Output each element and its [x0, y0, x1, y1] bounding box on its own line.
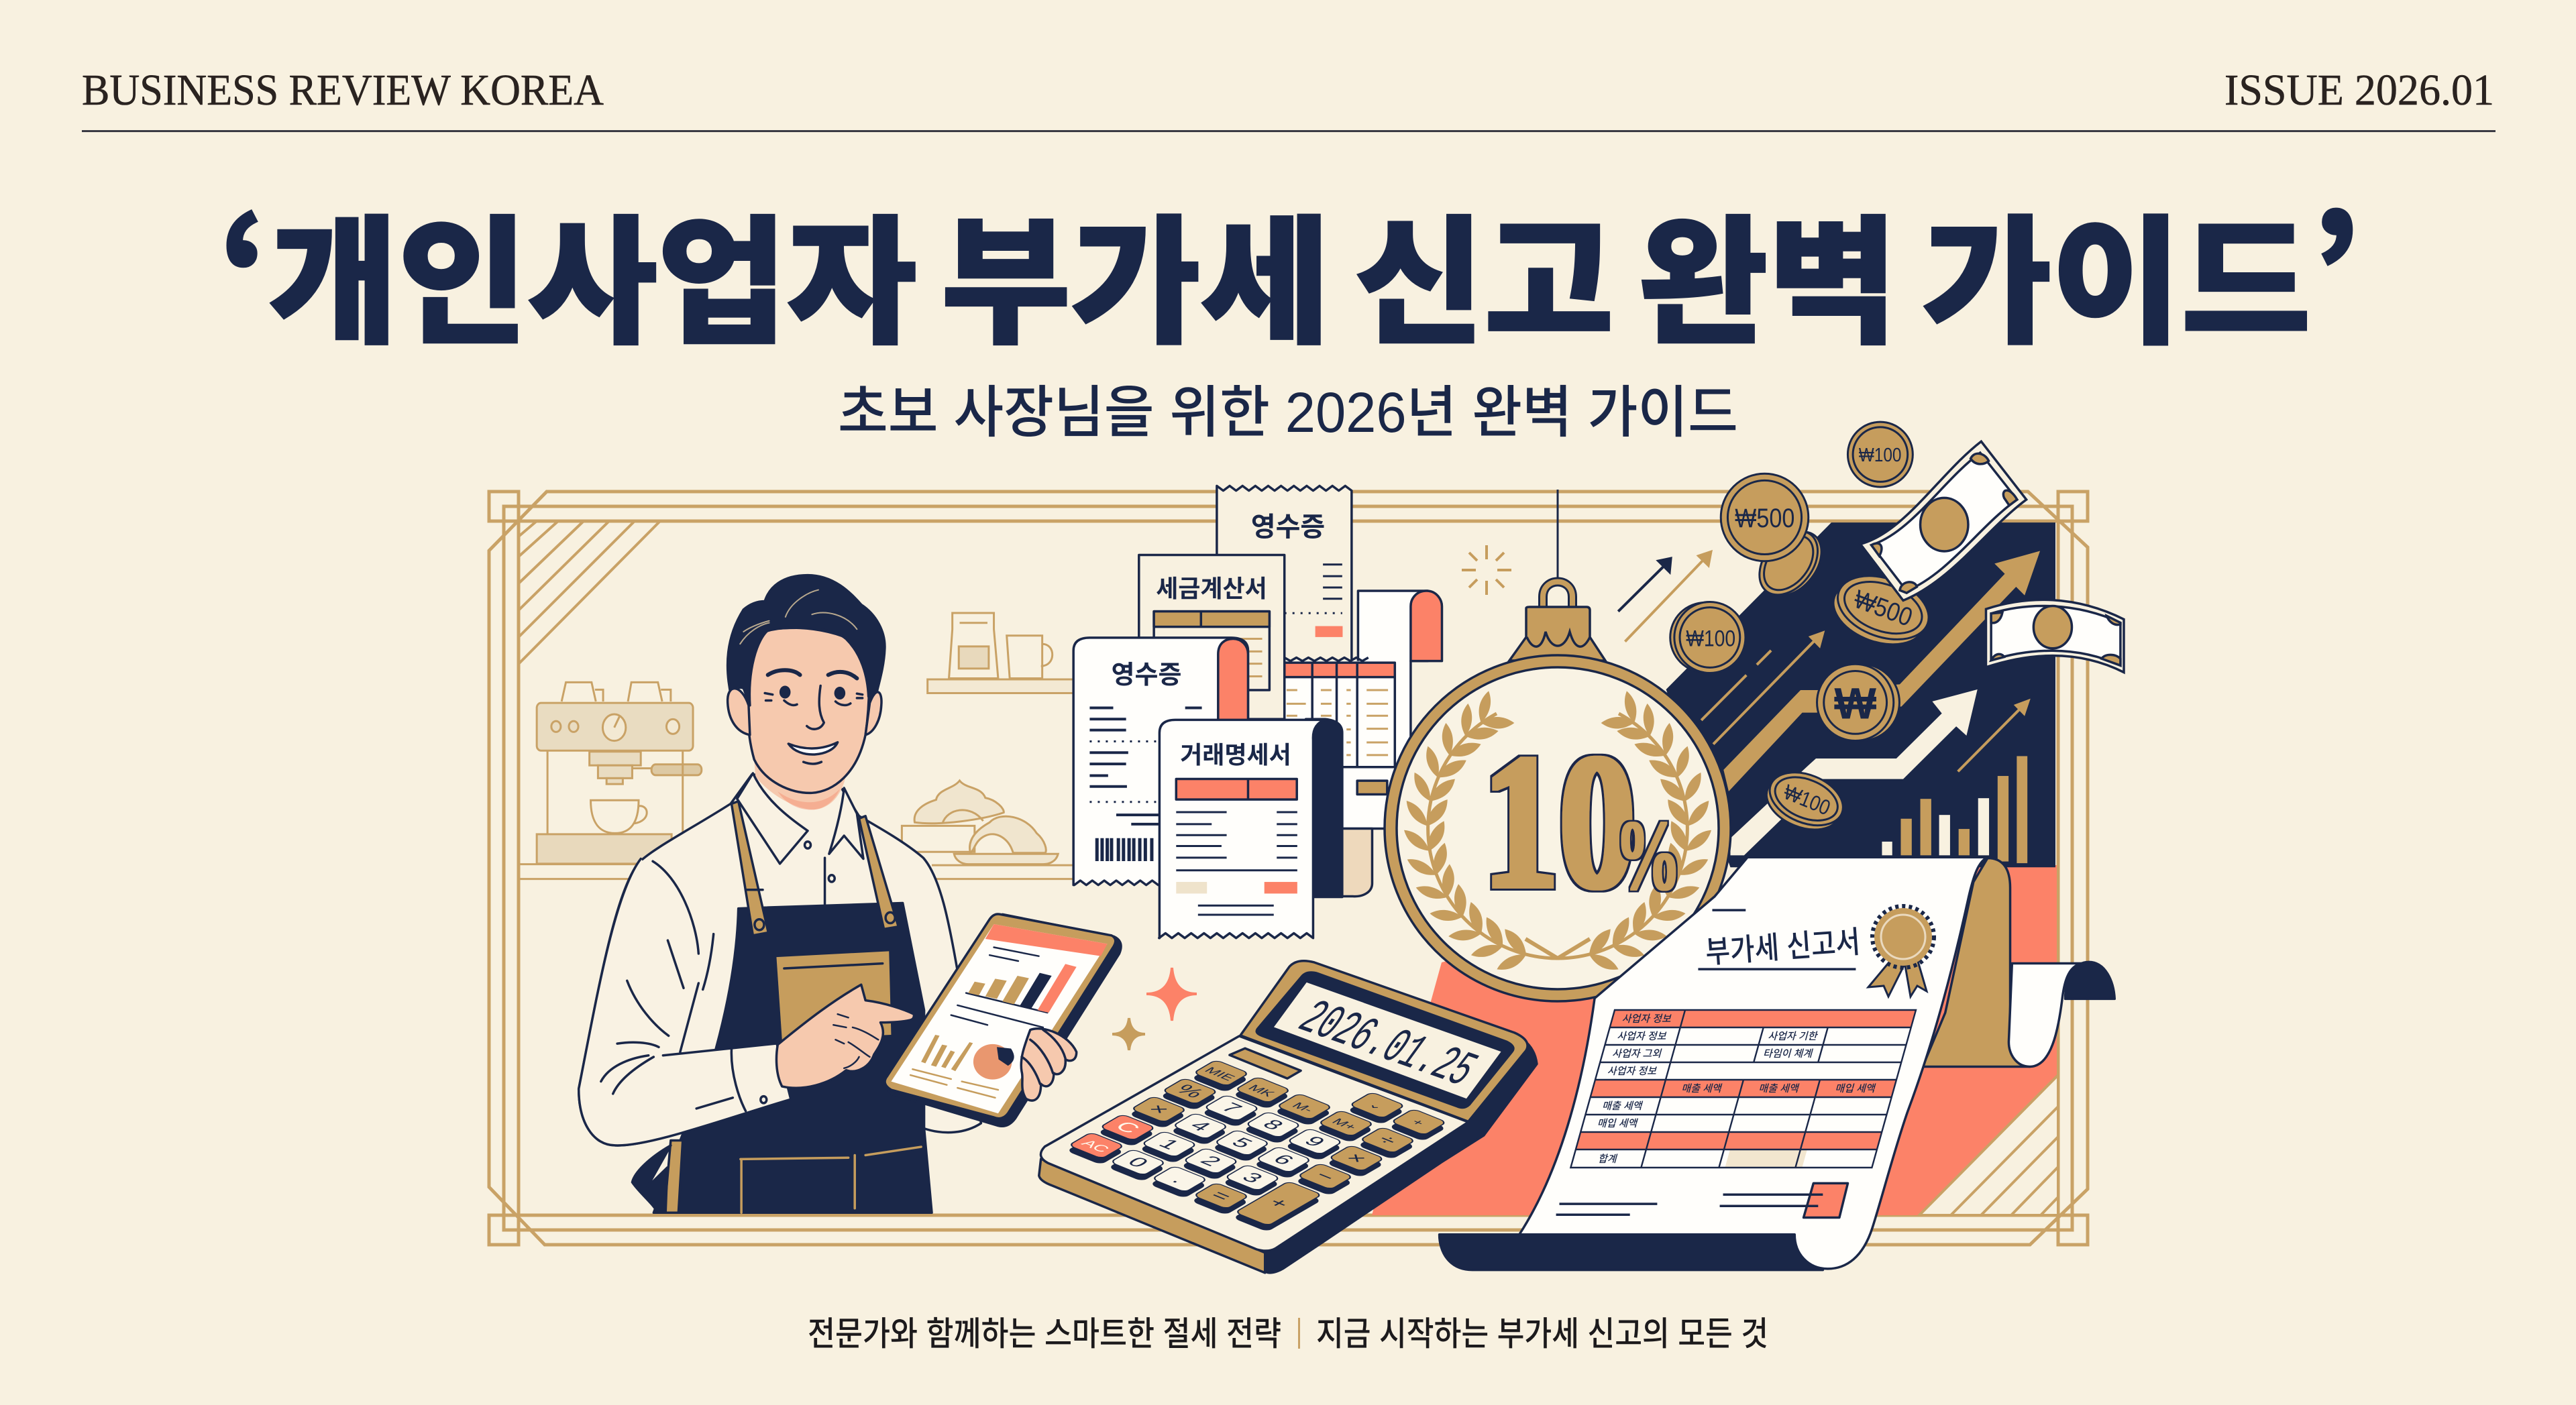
memory and function keys: MK [1244, 1083, 1278, 1099]
white arrow [1731, 689, 1978, 855]
number keys: 6 [1268, 1151, 1299, 1168]
coin: won sign: ₩ [1834, 679, 1876, 728]
calculator keypad [1063, 1042, 1452, 1231]
apron lower pocket stitching [741, 1147, 921, 1213]
table white rows [1570, 1027, 1911, 1168]
label: statement: 거래명세서 [1180, 736, 1291, 771]
solar strip [1230, 1048, 1301, 1078]
number keys: 5 [1226, 1135, 1258, 1151]
coin: 500: ₩500 [1735, 504, 1794, 533]
memory and function keys: ⌄ [1364, 1100, 1388, 1112]
calculator [1039, 961, 1537, 1273]
title: ‘개인사업자 부가세 신고 완벽 가이드’ [219, 172, 2361, 372]
table sheet [1285, 657, 1395, 767]
memory and function keys: M+ [1328, 1117, 1360, 1132]
scroll navy base [1440, 1235, 1823, 1270]
statement stamps [1176, 882, 1297, 893]
tax invoice header [1154, 612, 1269, 690]
table labels: 사업자 정보 [1616, 1031, 1668, 1042]
number keys: 0 [1122, 1154, 1154, 1170]
shirt torso [579, 774, 981, 1145]
navy chart panel with growth arrows [1618, 522, 2055, 867]
face details [765, 670, 863, 764]
banknote: upper [1860, 441, 2027, 600]
finger lines [1022, 1030, 1065, 1084]
coin: tilted 500 [1825, 563, 1937, 657]
document stack [1073, 486, 1442, 938]
ornament ring [1385, 655, 1731, 1001]
VAT return scroll [1440, 857, 2114, 1270]
tax invoice document [1139, 555, 1285, 719]
table labels: 매입 세액 [1597, 1118, 1640, 1129]
shirt sleeve [579, 859, 790, 1145]
tablet small bars and pie [921, 1035, 1014, 1080]
table labels: 사업자 정보 [1621, 1013, 1673, 1025]
large plus key: + [1263, 1195, 1295, 1211]
scroll right white curl [2008, 963, 2082, 1066]
seal with ribbon [1868, 907, 1933, 997]
coins and banknotes [1670, 422, 2124, 840]
footer tagline left: 전문가와 함께하는 스마트한 절세 전략 [808, 1307, 1281, 1355]
table labels: 매입 세액 [1834, 1083, 1877, 1094]
ornament string [1556, 490, 1559, 583]
display housing [1240, 961, 1527, 1121]
coin: 100 middle [1670, 602, 1746, 673]
art deco frame [489, 492, 2088, 1245]
ornament cap [1509, 582, 1605, 661]
pointing hand [776, 985, 914, 1088]
sign stamp [1804, 1183, 1847, 1218]
memory and function keys: MIE [1201, 1066, 1238, 1082]
table labels: 매출 세액 [1601, 1101, 1644, 1112]
lower shelf lines [519, 864, 1075, 879]
icon: espresso machine [537, 682, 702, 864]
number keys: 8 [1258, 1117, 1289, 1133]
finger creases [833, 1014, 878, 1068]
receipt lines top [1285, 565, 1342, 613]
coin: 100 middle: ₩100 [1686, 626, 1735, 652]
shirt placket and buttons [805, 842, 835, 905]
apron straps [632, 801, 898, 1213]
icon: pastries on plate [902, 781, 1058, 864]
laurel wreath [1403, 690, 1712, 975]
apron [653, 903, 932, 1213]
hair highlights [740, 590, 857, 644]
number keys: 7 [1216, 1100, 1248, 1116]
coin: 500 [1721, 473, 1809, 561]
coin: tilted 500: ₩500 [1850, 585, 1916, 632]
scroll navy curl tip [2065, 962, 2114, 999]
thin arrows on navy [1701, 630, 2031, 771]
calculator gold front edge [1039, 1159, 1265, 1273]
memory and function keys: ÷ [1373, 1132, 1403, 1148]
footer divider [1298, 1318, 1300, 1349]
coral backdrop [1372, 865, 2057, 1215]
sleeve outline and folds [579, 859, 790, 1145]
value: percent sign: % [1615, 801, 1681, 911]
left receipt lines [1089, 708, 1202, 824]
cafe background: shelves, coffee machine, pastries [519, 613, 1075, 879]
sparkle: gold [1112, 1018, 1145, 1050]
clear keys: AC [1078, 1137, 1114, 1154]
tax form table [1570, 1010, 1916, 1168]
table labels: 사업자 정보 [1607, 1066, 1658, 1077]
table labels: 매출 세액 [1758, 1083, 1801, 1094]
masthead: issue number: ISSUE 2026.01 [2224, 66, 2494, 115]
number keys: 4 [1185, 1118, 1216, 1134]
number keys: 3 [1237, 1170, 1269, 1186]
receipt: top [1217, 486, 1352, 665]
hair [728, 575, 885, 706]
hanging 10% ornament [1385, 582, 1731, 1001]
memory and function keys: = [1205, 1188, 1238, 1204]
corner stripes: bottom right [1919, 1075, 2058, 1215]
coin: 100 top: ₩100 [1859, 445, 1901, 466]
label: receipt left: 영수증 [1112, 654, 1181, 691]
coin: won sign [1817, 664, 1899, 740]
memory and function keys: − [1309, 1168, 1342, 1184]
table shaded rows [1576, 1010, 1916, 1149]
footer tagline right: 지금 시작하는 부가세 신고의 모든 것 [1316, 1307, 1768, 1355]
scroll gold back roll [1923, 858, 2030, 1066]
number keys: 2 [1195, 1153, 1227, 1169]
number keys [1104, 1094, 1348, 1215]
memory and function keys: + [1408, 1117, 1428, 1127]
memory and function keys: × [1340, 1150, 1373, 1166]
clear keys: C [1110, 1119, 1146, 1136]
face [747, 628, 869, 793]
ears [728, 689, 881, 735]
arrowheads [1656, 550, 1713, 575]
table labels: 매출 세액 [1680, 1083, 1723, 1094]
tablet bar chart [968, 964, 1077, 1013]
masthead: publication name: BUSINESS REVIEW KOREA [82, 66, 604, 115]
memory and function keys: % [1171, 1082, 1210, 1101]
statement lines [1176, 812, 1297, 915]
number keys: 9 [1299, 1133, 1331, 1149]
receipt: front trading statement [1159, 719, 1342, 938]
thin cream-area arrows [1618, 557, 1707, 642]
statement table header [1176, 779, 1297, 799]
number keys: 1 [1154, 1136, 1185, 1152]
cuff button [761, 1097, 767, 1103]
scroll white sheet [1519, 857, 1988, 1269]
calculator display value: 2026.01.25 [1286, 991, 1487, 1099]
receipt: left with coral curl [1073, 638, 1248, 885]
table grid [1570, 1010, 1916, 1168]
coin: 100 top [1847, 422, 1913, 487]
calculator face [1040, 1036, 1468, 1251]
sheet lower beige curl [1332, 767, 1411, 897]
receipt: back scroll with table [1358, 591, 1442, 769]
receipt red stamp [1316, 626, 1342, 637]
coin: tilted 100 [1759, 762, 1851, 840]
table labels: 사업자 그외 [1611, 1048, 1664, 1060]
barcode [1097, 838, 1152, 861]
value: 10 percent: 10 [1483, 715, 1635, 928]
big gold arrow [1723, 551, 2040, 791]
smile [788, 742, 838, 754]
clear keys [1063, 1114, 1161, 1164]
memory and function keys: M- [1289, 1101, 1317, 1114]
table labels [1582, 1013, 1896, 1165]
table labels: 합계 [1597, 1154, 1619, 1165]
calculator navy side [1265, 1033, 1537, 1273]
sunburst accent [1462, 545, 1511, 595]
eyes [780, 686, 845, 699]
table labels: 타임이 체계 [1762, 1048, 1815, 1060]
scroll lines [1556, 910, 1856, 1215]
number keys: . [1167, 1172, 1193, 1186]
table labels: 사업자 기한 [1767, 1031, 1819, 1042]
banknote: right [1986, 600, 2124, 672]
sparkle: coral [1146, 968, 1197, 1021]
icon: upper shelf with coffee bag and mug [928, 613, 1075, 693]
apron pocket [776, 951, 891, 1039]
neck [754, 759, 846, 809]
bar chart [1882, 756, 2027, 863]
holding hand fingers [1021, 1029, 1077, 1101]
tablet [883, 914, 1121, 1126]
large plus key [1229, 1181, 1327, 1231]
label: tax invoice: 세금계산서 [1156, 569, 1267, 604]
coin: tilted 100: ₩100 [1780, 779, 1834, 820]
label: receipt top: 영수증 [1251, 505, 1325, 544]
memory and function keys: × [1143, 1101, 1175, 1117]
character: cafe owner in apron [579, 575, 1121, 1213]
memory and function keys [1063, 1042, 1452, 1231]
subtitle: 초보 사장님을 위한 2026년 완벽 가이드 [838, 368, 1738, 449]
scroll title: 부가세 신고서 [1704, 917, 1862, 972]
coin: tilted behind [1748, 518, 1833, 608]
shirt collar [737, 773, 863, 864]
